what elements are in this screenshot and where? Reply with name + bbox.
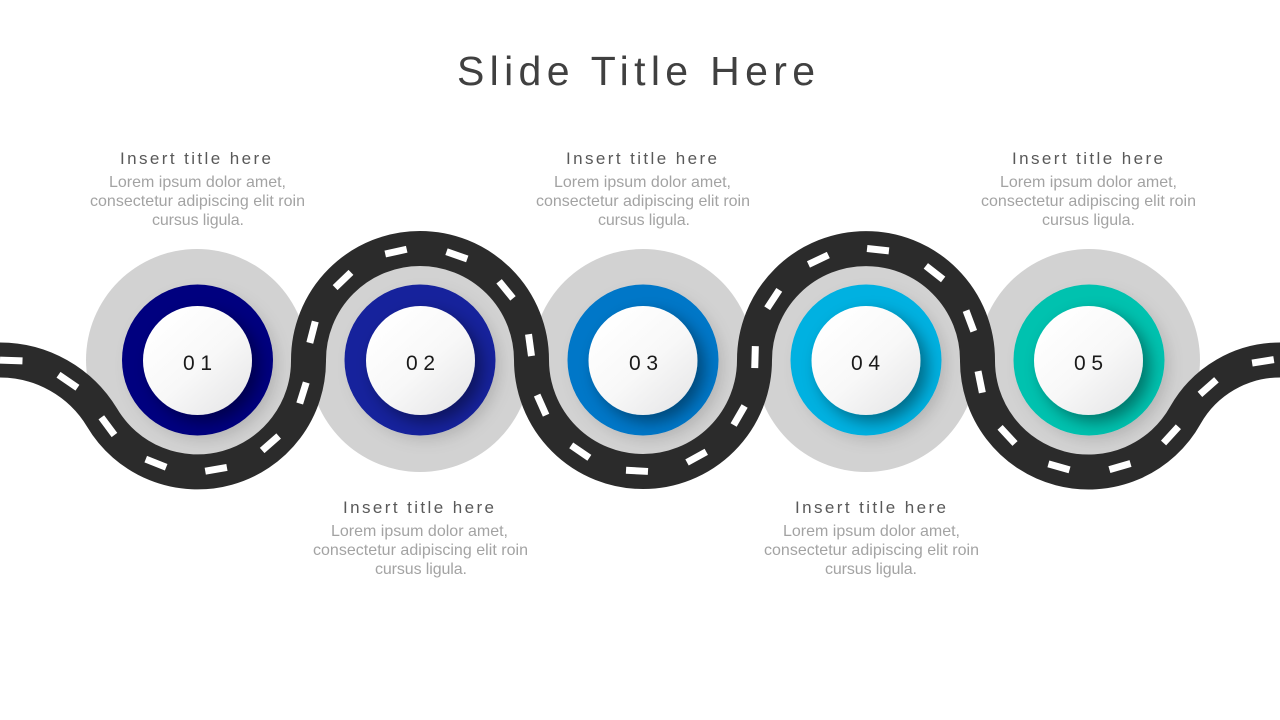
text block: step 2: Insert title here [343,498,494,517]
text block: step 1 [90,149,305,229]
text block: step 3: Insert title here [566,149,717,168]
title: Slide Title Here [457,48,815,94]
text block: step 1: consectetur adipiscing elit roin [90,193,305,210]
text block: step 1: Insert title here [120,149,271,168]
step 5 circle [978,249,1200,471]
step 4 circle: 04 [851,352,880,375]
text block: step 2 [313,498,528,578]
text block: step 3: cursus ligula. [598,212,690,229]
step 5 circle: 05 [1074,352,1103,375]
step 3 circle [532,249,754,471]
text block: step 4 [764,498,979,578]
text block: step 5 [981,149,1196,229]
text block: step 3: consectetur adipiscing elit roin [536,193,750,210]
text block: step 5: Insert title here [1012,149,1163,168]
text block: step 1: cursus ligula. [152,212,244,229]
text block: step 4: consectetur adipiscing elit roin [764,542,979,559]
step 1 circle [86,249,308,471]
text block: step 2: cursus ligula. [375,561,467,578]
text block: step 4: Lorem ipsum dolor amet, [783,523,960,540]
text block: step 5: consectetur adipiscing elit roin [981,193,1196,210]
step 2 circle [309,250,531,472]
text block: step 3 [536,149,750,229]
text block: step 4: Insert title here [795,498,946,517]
step 1 circle: 01 [183,352,212,375]
text block: step 3: Lorem ipsum dolor amet, [554,174,731,191]
text block: step 2: Lorem ipsum dolor amet, [331,523,508,540]
text block: step 1: Lorem ipsum dolor amet, [109,174,286,191]
step 3 circle: 03 [629,352,658,375]
step 4 circle [755,250,977,472]
step 2 circle: 02 [406,352,435,375]
winding road [0,245,1280,475]
text block: step 5: cursus ligula. [1042,212,1135,229]
text block: step 5: Lorem ipsum dolor amet, [1000,174,1177,191]
text block: step 2: consectetur adipiscing elit roin [313,542,528,559]
text block: step 4: cursus ligula. [825,561,917,578]
